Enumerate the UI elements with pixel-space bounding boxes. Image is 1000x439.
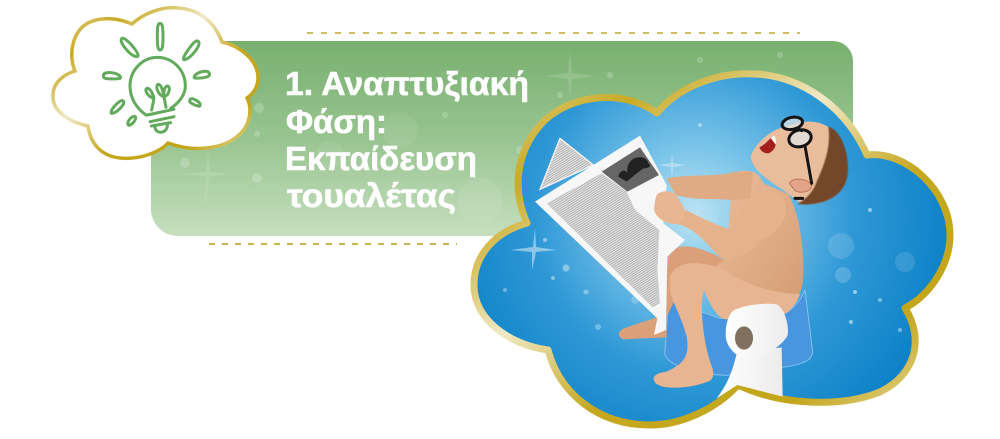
panel: green title banner bbox=[151, 41, 853, 236]
far arm bbox=[667, 172, 753, 200]
sparkles in blue cloud bbox=[503, 123, 915, 332]
divider: top dashed gold line bbox=[307, 32, 800, 34]
sparkle star left bbox=[510, 228, 556, 270]
title: 1. Αναπτυξιακή bbox=[285, 65, 529, 102]
ear bbox=[789, 179, 812, 192]
icon: light bulb bbox=[103, 23, 210, 132]
toilet roll lower bbox=[717, 347, 783, 398]
title: Φάση: bbox=[286, 103, 387, 140]
toilet roll upper bbox=[726, 304, 788, 359]
baby on potty illustration bbox=[535, 115, 848, 398]
torso bbox=[707, 171, 803, 318]
head bbox=[751, 122, 845, 204]
far leg bbox=[619, 246, 725, 339]
back page of newspaper bbox=[540, 138, 593, 189]
near leg bbox=[654, 263, 800, 388]
photo cloud: blue background with gold border bbox=[474, 74, 950, 425]
hair bbox=[797, 127, 848, 204]
mouth bbox=[759, 135, 776, 153]
newspaper text columns bbox=[547, 173, 660, 307]
teeth bbox=[771, 135, 776, 145]
sparkle star centre bbox=[658, 152, 686, 178]
near arm bbox=[677, 190, 786, 258]
title: Εκπαίδευση bbox=[285, 140, 477, 177]
small white cloud bbox=[53, 8, 258, 158]
hand bbox=[654, 191, 685, 224]
newspaper photo bbox=[602, 147, 659, 192]
trees in photo bbox=[618, 157, 650, 182]
potty bbox=[665, 290, 813, 375]
roll hole bbox=[735, 326, 753, 350]
title: τουαλέτας bbox=[287, 177, 456, 214]
divider: bottom dashed gold line bbox=[209, 243, 457, 245]
newspaper bbox=[535, 136, 685, 335]
glasses bbox=[781, 115, 813, 198]
title bbox=[285, 65, 529, 214]
